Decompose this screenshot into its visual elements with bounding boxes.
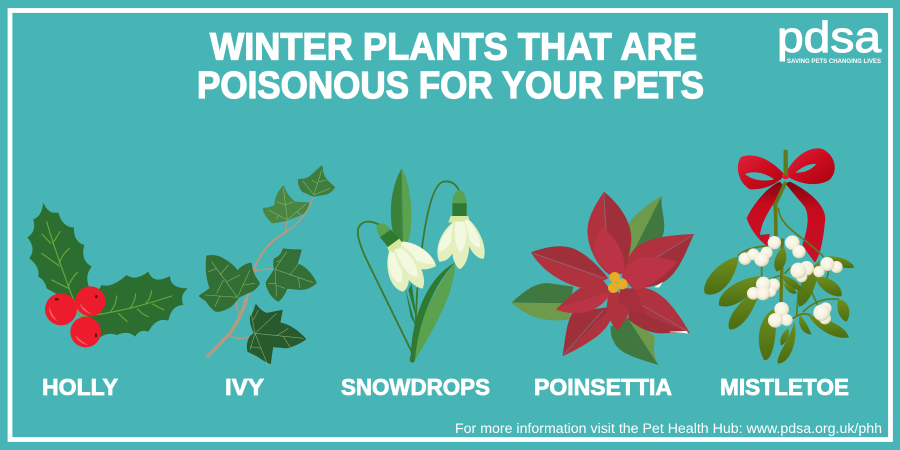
poinsettia white edge marks (654, 282, 688, 334)
poinsettia back petals (531, 192, 694, 356)
plant: ivy (200, 167, 334, 367)
plant name labels: IVY (225, 374, 264, 400)
ivy leaf upper (264, 187, 308, 222)
snowdrop lower wide leaf (410, 263, 455, 363)
plant: snowdrops (358, 168, 485, 363)
ivy stems (207, 195, 314, 357)
snowdrop stems (358, 181, 459, 352)
plant: mistletoe (704, 148, 854, 363)
title (197, 26, 704, 107)
holly veins (42, 222, 172, 322)
ivy leaf bottom (248, 305, 305, 363)
mistletoe berries (739, 235, 843, 328)
mistletoe ribbon tails (747, 182, 825, 263)
snowdrop tall leaf (402, 168, 411, 260)
holly berries (45, 286, 105, 347)
ivy leaf right (267, 249, 316, 301)
ivy leaf left (200, 256, 259, 311)
poinsettia petal veins (533, 193, 692, 354)
poinsettia green leaves (512, 196, 664, 365)
snowdrop left flower (377, 223, 436, 292)
mistletoe leaves (704, 247, 854, 363)
plant name labels (42, 374, 849, 400)
logo: pdsa: pdsa (777, 13, 882, 62)
poinsettia centre (608, 272, 628, 293)
ivy veins (205, 170, 330, 367)
plant name labels: MISTLETOE (720, 374, 849, 400)
plant: holly (27, 203, 188, 347)
snowdrop lower narrow leaf (405, 283, 417, 327)
holly right leaf (87, 272, 188, 337)
plant name labels: HOLLY (42, 374, 118, 400)
ivy leaf top right (299, 167, 334, 196)
mistletoe stems (738, 152, 838, 318)
title: POISONOUS FOR YOUR PETS (197, 65, 704, 107)
footer link text: For more information visit the Pet Health Hub: www.pdsa.org.uk/phh (455, 421, 882, 436)
plant name labels: POINSETTIA (534, 374, 672, 400)
title: WINTER PLANTS THAT ARE (210, 26, 697, 68)
logo: pdsa: SAVING PETS CHANGING LIVES (787, 58, 882, 65)
poinsettia front petals (556, 227, 677, 331)
holly upper leaf (27, 203, 92, 302)
plant name labels: SNOWDROPS (341, 374, 490, 400)
snowdrop right flower (437, 190, 485, 269)
mistletoe ribbon bow (738, 148, 835, 189)
plant: poinsettia (512, 192, 694, 365)
